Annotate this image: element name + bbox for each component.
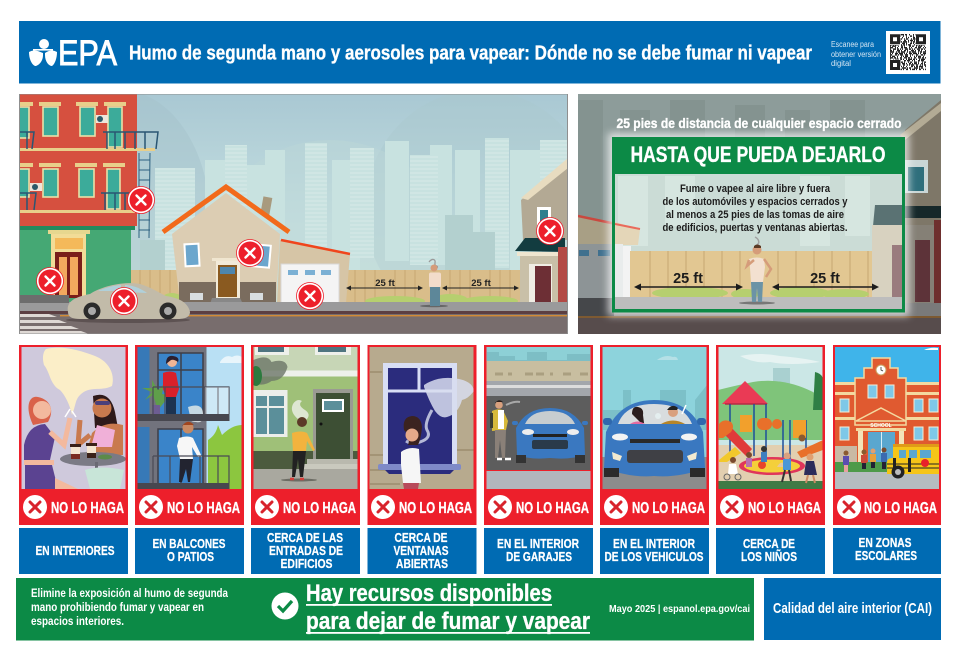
label: ninos: LOS NIÑOS bbox=[741, 549, 797, 564]
bushes bbox=[164, 293, 518, 302]
building: red brick bbox=[19, 94, 158, 302]
house bbox=[163, 187, 289, 304]
headline link bbox=[306, 580, 590, 635]
arrows: 25 ft: 25 ft bbox=[673, 271, 703, 287]
scene inside callout bbox=[615, 174, 902, 309]
banner: no lo haga bbox=[255, 495, 356, 519]
label: garajes: DE GARAJES bbox=[506, 549, 572, 564]
card: vehiculos bbox=[600, 345, 709, 525]
heading: HASTA QUE PUEDA DEJARLO bbox=[630, 142, 886, 167]
balconies bbox=[19, 132, 158, 210]
advice text: de edificios, puertas y ventanas abiertas. bbox=[662, 222, 848, 234]
label: vehiculos: DE LOS VEHICULOS bbox=[604, 549, 704, 564]
card: balcones bbox=[135, 345, 244, 525]
caption: 25 feet: 25 pies de distancia de cualquier espacio cerrado bbox=[616, 115, 902, 131]
illustration: two women smoking bbox=[22, 347, 126, 489]
banner: no lo haga: NO LO HAGA bbox=[167, 500, 240, 517]
arrows: 25 ft bbox=[634, 271, 879, 290]
advice text bbox=[662, 183, 848, 234]
card: en interiores bbox=[19, 345, 128, 525]
label: entradas: CERCA DE LAS bbox=[267, 530, 343, 545]
label: entradas bbox=[251, 528, 360, 574]
label: ventanas: CERCA DE bbox=[394, 530, 448, 545]
advice text: Fume o vapee al aire libre y fuera bbox=[680, 183, 831, 195]
card: ninos bbox=[716, 345, 825, 525]
label: garajes bbox=[484, 528, 593, 574]
date and url: Mayo 2025 | espanol.epa.gov/cai bbox=[609, 603, 750, 615]
label: entradas: ENTRADAS DE bbox=[269, 543, 343, 558]
icon: air conditioners bbox=[30, 115, 108, 191]
illustration: playground bbox=[718, 347, 823, 489]
shop door bbox=[48, 230, 90, 298]
label: escuelas bbox=[833, 528, 941, 574]
banner: no lo haga: NO LO HAGA bbox=[399, 500, 472, 517]
scan caption: Escanee para bbox=[831, 40, 874, 49]
illustration: garage and car bbox=[486, 347, 590, 489]
illustration: balconies bbox=[138, 347, 242, 489]
label: balcones: EN BALCONES bbox=[152, 536, 226, 551]
label: garajes: EN EL INTERIOR bbox=[497, 536, 579, 551]
car bbox=[66, 283, 190, 323]
banner: no lo haga bbox=[720, 495, 821, 519]
banner: no lo haga: NO LO HAGA bbox=[516, 500, 589, 517]
person smoking bbox=[420, 259, 448, 307]
label: ninos bbox=[716, 528, 825, 574]
distance markers: 25 ft bbox=[375, 278, 396, 289]
text: eliminate exposure: mano prohibiendo fumar y vapear en bbox=[31, 602, 204, 614]
icon: EPA logo: EPA bbox=[58, 34, 118, 73]
card: ventanas bbox=[368, 345, 476, 525]
label: entradas: EDIFICIOS bbox=[280, 556, 333, 571]
white glow bbox=[608, 133, 909, 316]
person smoking bbox=[739, 237, 775, 304]
scan caption: obtener versión bbox=[831, 50, 881, 59]
banner: no lo haga bbox=[23, 495, 124, 519]
city skyline bbox=[131, 138, 567, 270]
card: entradas bbox=[250, 345, 360, 525]
banner: no lo haga: NO LO HAGA bbox=[283, 500, 356, 517]
garage bbox=[277, 238, 350, 302]
callout: HASTA QUE PUEDA DEJARLO bbox=[612, 137, 905, 312]
label: ventanas: ABIERTAS bbox=[396, 556, 448, 571]
banner: no lo haga: NO LO HAGA bbox=[632, 500, 705, 517]
headline link: para dejar de fumar y vapear bbox=[306, 608, 590, 635]
panel: 25 feet rule bbox=[578, 93, 941, 334]
banner: no lo haga bbox=[837, 495, 937, 519]
label: vehiculos: EN EL INTERIOR bbox=[613, 536, 695, 551]
headline link: Hay recursos disponibles bbox=[306, 580, 552, 607]
footer: indoor air quality bbox=[764, 578, 941, 640]
text: eliminate exposure: espacios interiores. bbox=[31, 616, 124, 628]
banner: no lo haga bbox=[371, 495, 472, 519]
illustration: open window bbox=[370, 347, 474, 489]
illustration: building entrance bbox=[250, 347, 358, 489]
banner: no lo haga bbox=[488, 495, 589, 519]
footer: resources bbox=[16, 578, 754, 640]
scan caption bbox=[831, 40, 881, 68]
text: eliminate exposure: Elimine la exposición al humo de segunda bbox=[31, 588, 229, 600]
house: right neighbour bbox=[515, 158, 568, 307]
banner: no lo haga bbox=[139, 495, 240, 519]
advice text: de los automóviles y espacios cerrados y bbox=[662, 196, 848, 208]
label: vehiculos bbox=[600, 528, 709, 574]
fence bbox=[130, 270, 525, 303]
title: Humo de segunda mano y aerosoles para vapear: Dónde no se debe fumar ni vapear bbox=[129, 42, 812, 64]
distance markers: 25 ft bbox=[471, 278, 492, 289]
label: ventanas bbox=[368, 528, 476, 574]
scan caption: digital bbox=[831, 59, 851, 68]
card: garajes bbox=[484, 345, 593, 525]
icon: EPA logo bbox=[29, 34, 118, 73]
illustration: school bbox=[835, 347, 939, 489]
label: balcones: O PATIOS bbox=[167, 549, 214, 564]
illustration: school: SCHOOL bbox=[870, 423, 892, 429]
street bbox=[19, 295, 568, 334]
distance markers bbox=[346, 280, 519, 290]
icon: check mark bbox=[272, 592, 298, 620]
banner: no lo haga: NO LO HAGA bbox=[51, 500, 124, 517]
dimmed skyline bbox=[578, 100, 865, 230]
label: balcones bbox=[135, 528, 244, 574]
text: eliminate exposure bbox=[31, 588, 229, 628]
advice text: al menos a 25 pies de las tomas de aire bbox=[666, 209, 844, 221]
label: escuelas: EN ZONAS bbox=[858, 535, 912, 550]
fire escape ladder bbox=[139, 153, 150, 238]
illustration: people in car bbox=[602, 347, 707, 489]
dimmed houses and street bbox=[578, 100, 941, 334]
label: ninos: CERCA DE bbox=[743, 536, 795, 551]
icon: QR code bbox=[886, 31, 930, 74]
label: ventanas: VENTANAS bbox=[394, 543, 449, 558]
icon: no smoking markers bbox=[36, 186, 564, 314]
arrows: 25 ft: 25 ft bbox=[810, 271, 840, 287]
label: escuelas: ESCOLARES bbox=[855, 548, 917, 563]
card: escuelas bbox=[833, 345, 941, 525]
banner: no lo haga bbox=[604, 495, 705, 519]
panel: street scene bbox=[19, 94, 568, 334]
label: en interiores bbox=[19, 528, 128, 574]
header banner bbox=[19, 21, 940, 84]
label: en interiores: EN INTERIORES bbox=[36, 543, 115, 558]
banner: no lo haga: NO LO HAGA bbox=[748, 500, 821, 517]
